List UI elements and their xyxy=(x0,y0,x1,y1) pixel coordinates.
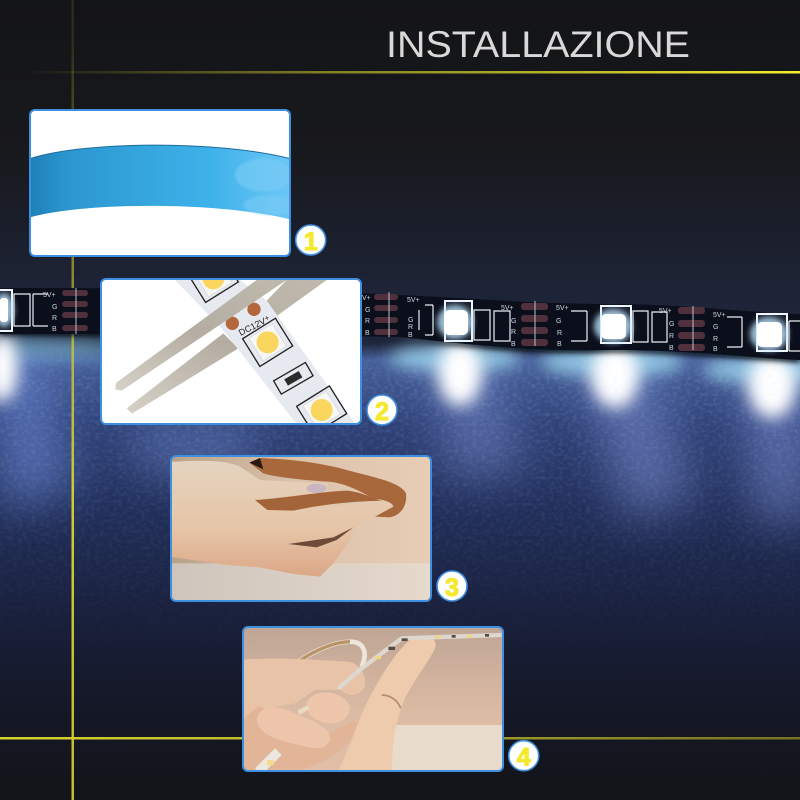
lower wall xyxy=(392,725,505,773)
badge 3: 3 xyxy=(445,574,459,602)
strip along wall xyxy=(338,635,502,688)
printed pad labels: G xyxy=(511,318,516,325)
printed pad labels: V+ xyxy=(362,295,371,302)
reflected light beams under the LEDs xyxy=(0,334,800,520)
lower cloth fold xyxy=(255,491,382,511)
upper scissor blade xyxy=(115,280,287,391)
upper cloth fold xyxy=(249,458,406,517)
badge 4 xyxy=(509,741,539,772)
printed pad labels: R xyxy=(52,315,57,322)
badge 1 xyxy=(296,225,326,256)
badge 4: 4 xyxy=(517,744,531,772)
panel 2: scissors cutting the strip: + xyxy=(263,313,271,323)
LED strip xyxy=(0,288,800,362)
printed pad labels: G xyxy=(52,304,57,311)
printed pad labels: B xyxy=(52,326,57,333)
lower wall xyxy=(170,563,433,603)
printed pad labels: B xyxy=(557,341,562,348)
LED frames xyxy=(0,290,787,351)
copper pads xyxy=(226,317,239,330)
printed pad labels: R xyxy=(669,333,674,340)
strip body xyxy=(0,288,800,360)
printed pad labels: R xyxy=(557,330,562,337)
strip shadow xyxy=(0,326,800,362)
printed pad labels: G xyxy=(713,324,718,331)
large thumb xyxy=(337,636,436,773)
lower scissor blade xyxy=(127,280,327,414)
panel 1: tape backing photo xyxy=(30,110,297,256)
strip loop xyxy=(298,642,365,667)
strip chips xyxy=(388,634,489,650)
printed pad labels: G xyxy=(669,321,674,328)
printed pad labels: B xyxy=(365,330,370,337)
printed pad labels: B xyxy=(713,346,718,353)
printed voltage label: DC12V xyxy=(237,316,267,338)
hand xyxy=(172,460,354,577)
white LED strip xyxy=(175,280,356,425)
panel 2: scissors cutting the strip xyxy=(100,278,362,425)
printed pad labels xyxy=(43,292,726,353)
LED chip at top xyxy=(190,280,240,304)
LED chip two xyxy=(296,385,348,423)
printed pad labels: B xyxy=(408,332,413,339)
printed pad labels: R xyxy=(365,318,370,325)
badge 2 xyxy=(367,395,397,426)
printed pad labels: R xyxy=(713,336,718,343)
printed pad labels: R xyxy=(511,329,516,336)
printed pad labels: 5V+ xyxy=(556,305,569,312)
printed pad labels: 5V+ xyxy=(659,308,672,315)
strip in hand xyxy=(258,752,278,772)
LED lit centres xyxy=(0,293,788,351)
fingernail xyxy=(307,484,327,493)
title: INSTALLAZIONE xyxy=(386,24,690,65)
badge 2: 2 xyxy=(375,398,389,426)
solder pads xyxy=(62,290,705,351)
surface texture xyxy=(0,358,800,571)
panel 4: pressing the strip onto the wall xyxy=(242,627,505,773)
badge 3 xyxy=(437,571,467,602)
badge 1: 1 xyxy=(304,228,318,256)
printed pad labels: G xyxy=(556,318,561,325)
printed pad labels: B xyxy=(511,341,516,348)
printed pad labels: 5V+ xyxy=(43,292,56,299)
printed pad labels: G xyxy=(408,317,413,324)
resistor xyxy=(274,363,313,394)
printed pad labels: G xyxy=(365,307,370,314)
printed pad labels: R xyxy=(408,324,413,331)
panel 3: cleaning the surface with a cloth xyxy=(170,456,433,603)
printed pad labels: 5V+ xyxy=(713,312,726,319)
shadow between fingers xyxy=(288,527,353,547)
cut lines xyxy=(76,288,693,350)
printed pad labels: 5V+ xyxy=(501,305,514,312)
LED chip one xyxy=(243,318,293,366)
printed pad labels: 5V+ xyxy=(407,297,420,304)
printed pad labels: B xyxy=(669,345,674,352)
back hand fingers xyxy=(244,658,366,718)
resistor outlines xyxy=(14,294,800,351)
blue adhesive tape xyxy=(30,145,290,219)
